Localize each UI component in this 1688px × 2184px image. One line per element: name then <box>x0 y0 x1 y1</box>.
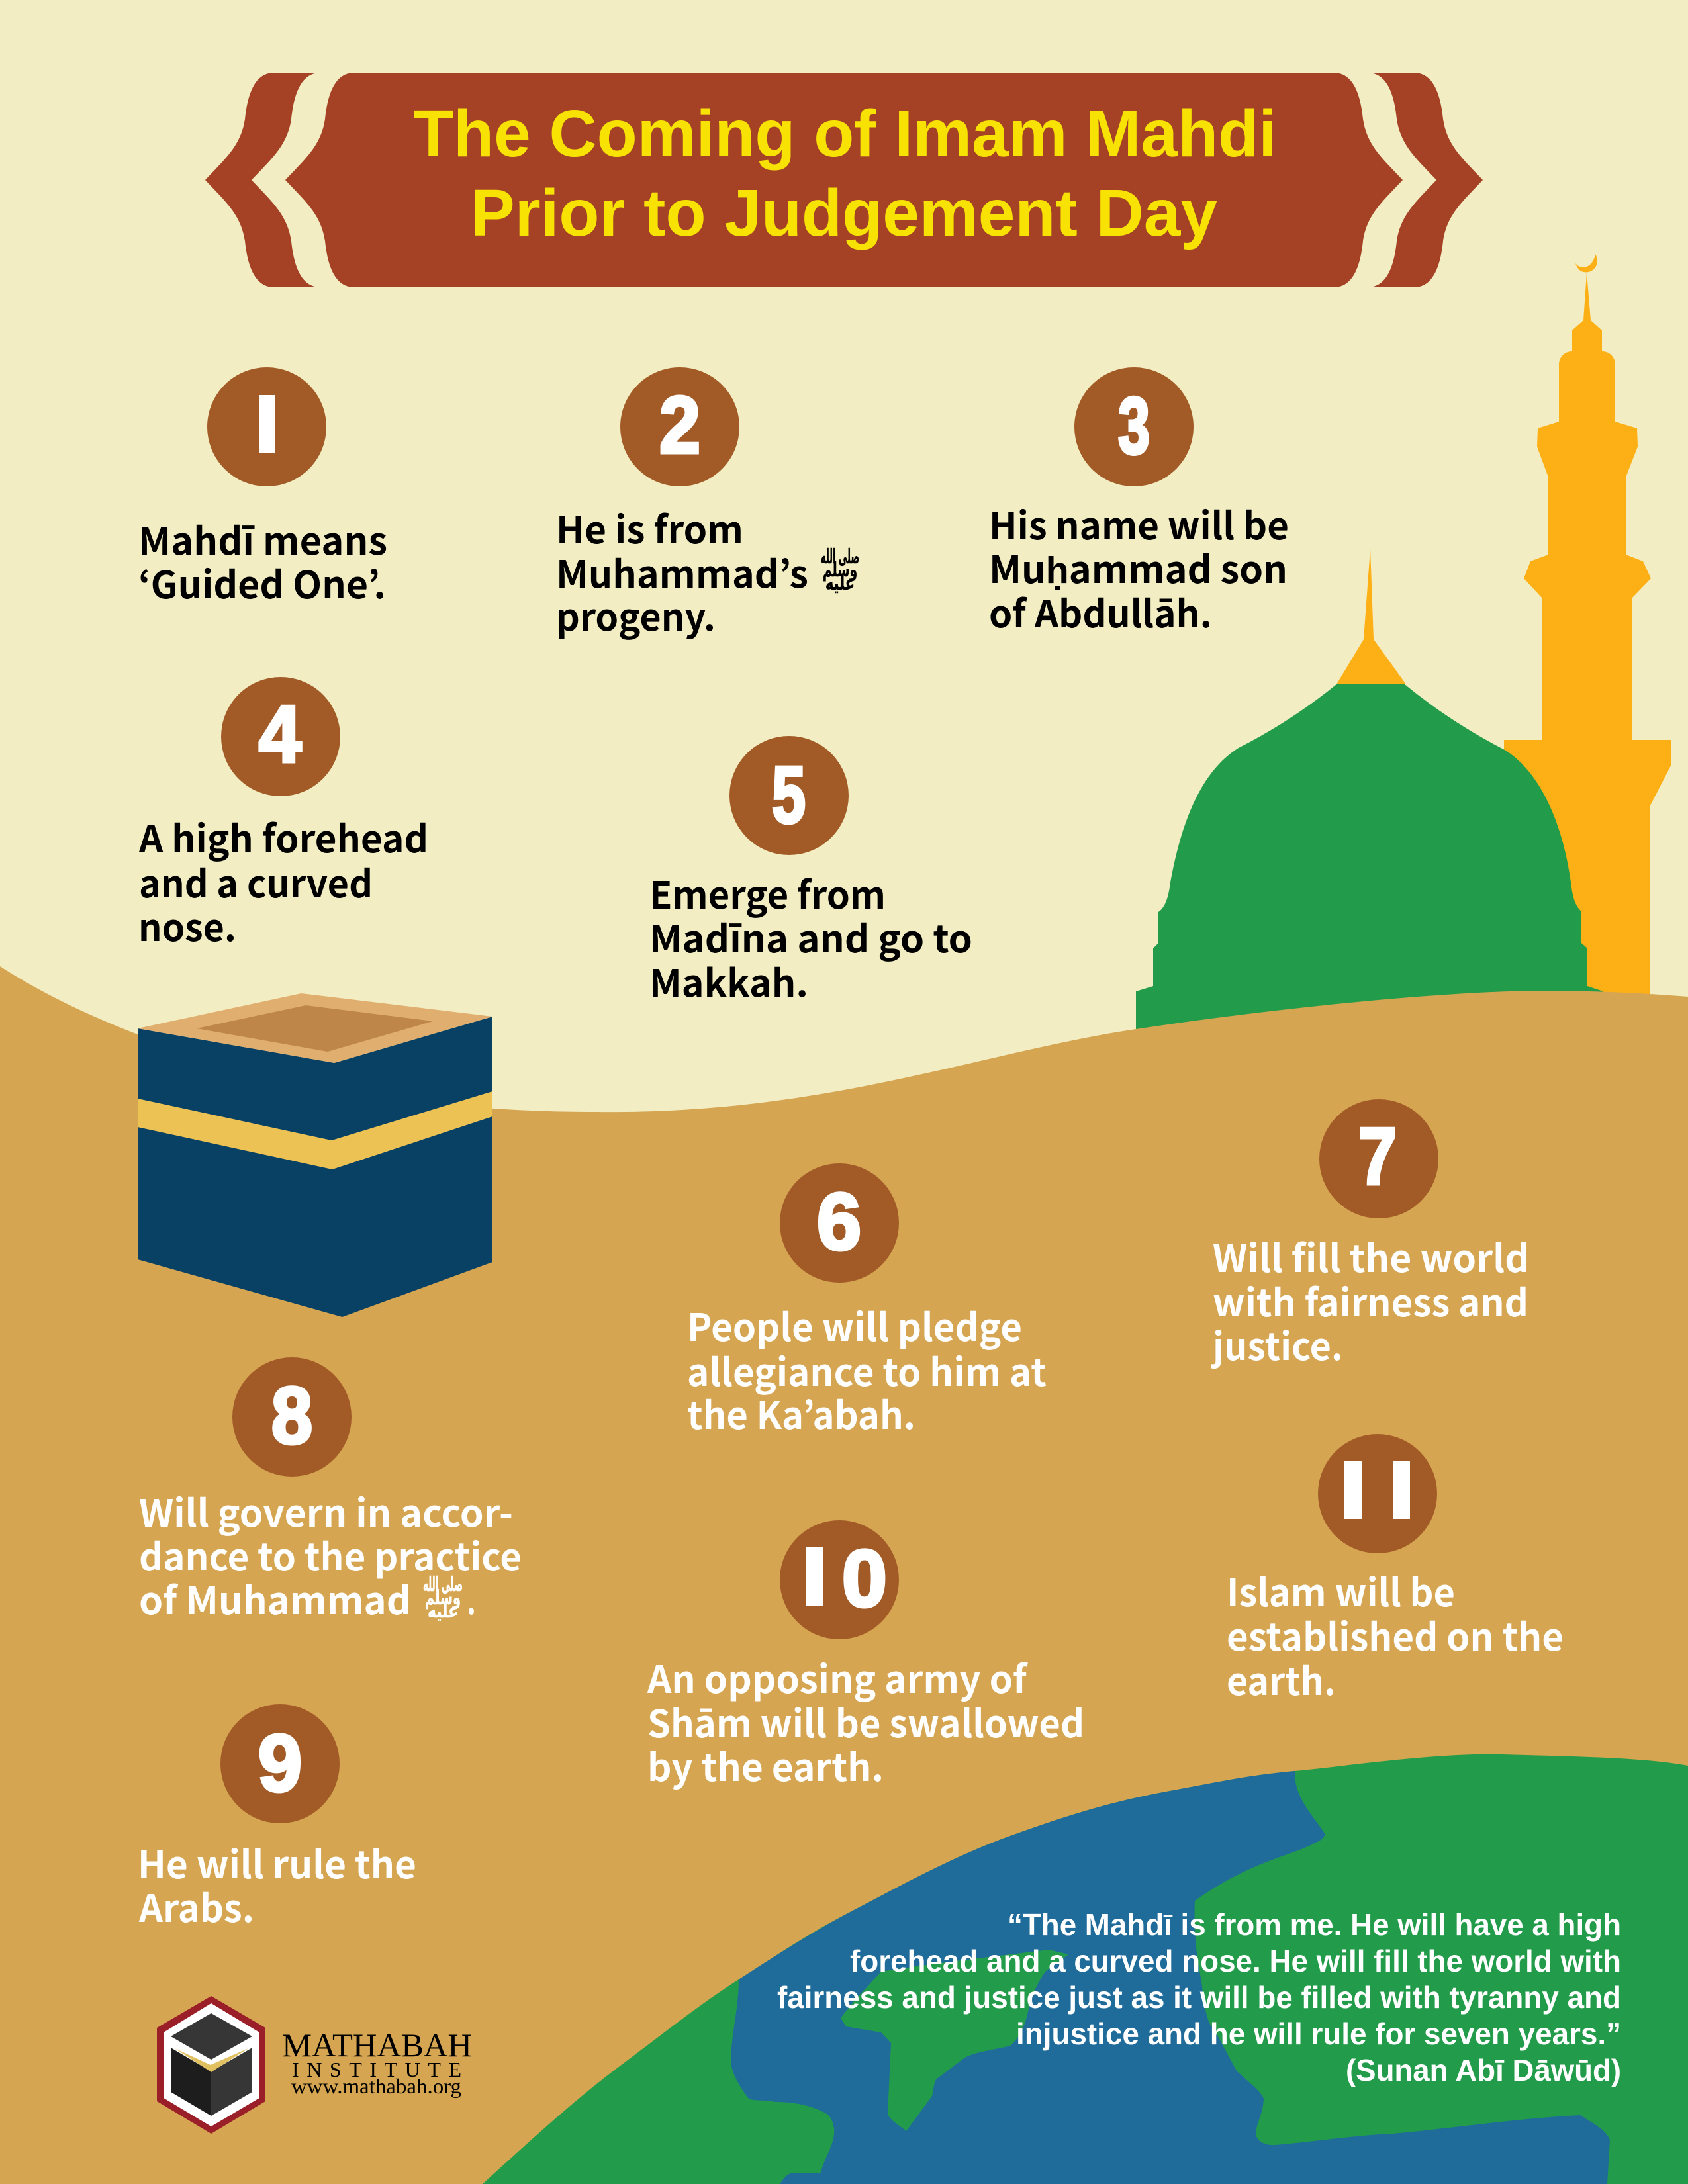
text: point 11: Islam will be <box>1227 1563 1455 1617</box>
number badge 10 <box>780 1520 899 1639</box>
title <box>413 97 1277 250</box>
text: point 8: dance to the practice <box>139 1527 522 1582</box>
number badge 6: 6 <box>817 1177 861 1267</box>
text: point 9: He will rule the <box>138 1835 416 1889</box>
number badge 6 <box>780 1163 899 1283</box>
text: point 1: ‘Guided One’. <box>138 555 386 610</box>
quote callout: forehead and a curved nose. He will fill the world with <box>850 1944 1621 1978</box>
number badge 10: 10 <box>790 1533 887 1623</box>
text: point 3 <box>989 496 1289 639</box>
logo wordmark <box>282 2026 472 2098</box>
icon: salutation calligraphy: عليه <box>428 1600 458 1623</box>
text: point 10: An opposing army of <box>647 1650 1029 1704</box>
number badge 1 <box>207 367 326 486</box>
icon: earth globe <box>483 1754 1688 2184</box>
quote callout: (Sunan Abī Dāwūd) <box>1346 2053 1621 2087</box>
text: point 2: Muhammad’s <box>556 545 808 599</box>
text: point 10: by the earth. <box>647 1738 884 1792</box>
title: The Coming of Imam Mahdi <box>413 97 1277 171</box>
text: point 6: the Ka’abah. <box>687 1386 915 1440</box>
text: point 4: A high forehead <box>138 809 428 864</box>
text: point 8: . <box>467 1571 476 1625</box>
icon: hexagon Kaaba emblem <box>157 1996 265 2134</box>
number badge 11 <box>1318 1434 1437 1553</box>
number badge 11: 11 <box>1328 1446 1422 1536</box>
number badge 4 <box>221 677 340 796</box>
text: point 6: People will pledge <box>687 1298 1022 1352</box>
panel: point 8: صلى الله <box>423 1573 463 1596</box>
text: point 1 <box>138 512 387 610</box>
icon: salutation calligraphy: وسلم <box>425 1586 461 1610</box>
text: point 8: of Muhammad <box>139 1571 411 1625</box>
icon: salutation calligraphy <box>821 545 859 595</box>
text: point 5: Makkah. <box>649 954 808 1008</box>
text: point 5: Emerge from <box>649 866 886 920</box>
number badge 9 <box>220 1704 340 1823</box>
text: point 7 <box>1210 1229 1529 1371</box>
number badge 5: 5 <box>772 750 806 840</box>
text: point 11 <box>1227 1563 1564 1706</box>
number badge 5 <box>729 736 849 855</box>
panel: point 3 <box>989 367 1289 639</box>
number badge 7: 7 <box>1358 1111 1397 1201</box>
banner: left bracket <box>205 73 320 287</box>
number badge 2 <box>620 367 739 486</box>
logo wordmark: INSTITUTE <box>292 2058 461 2081</box>
text: point 10 <box>647 1650 1084 1792</box>
quote callout: injustice and he will rule for seven years.” <box>1016 2017 1621 2051</box>
number badge 9: 9 <box>258 1718 302 1808</box>
text: point 6: allegiance to him at <box>687 1343 1047 1397</box>
text: point 4 <box>138 809 428 952</box>
number badge 8 <box>232 1357 352 1477</box>
number badge 8: 8 <box>271 1371 312 1461</box>
text: point 3: Muḥammad son <box>989 540 1288 594</box>
logo wordmark: MATHABAH <box>282 2026 472 2064</box>
text: point 8 <box>139 1484 522 1625</box>
quote callout: fairness and justice just as it will be filled with tyranny and <box>777 1980 1621 2015</box>
text: point 11: established on the <box>1227 1608 1564 1662</box>
text: point 5: Madīna and go to <box>649 909 972 964</box>
panel: point 8 <box>139 1357 522 1625</box>
text: point 9: Arabs. <box>138 1879 254 1933</box>
text: point 8: Will govern in accor- <box>139 1484 513 1538</box>
quote callout <box>777 1907 1621 2087</box>
number badge 1: 1 <box>242 380 287 470</box>
number badge 2: 2 <box>659 380 700 470</box>
text: point 2 <box>556 500 808 642</box>
panel: point 7 <box>1210 1099 1529 1371</box>
text: point 4: nose. <box>138 898 236 952</box>
icon: salutation calligraphy: عليه <box>825 572 855 595</box>
panel: point 4 <box>138 677 428 952</box>
logo: Mathabah Institute <box>157 1996 472 2134</box>
text: point 11: earth. <box>1227 1652 1336 1706</box>
sand ground <box>0 966 1688 2184</box>
panel: point 5 <box>649 736 972 1008</box>
text: point 5 <box>649 866 972 1008</box>
title: Prior to Judgement Day <box>471 176 1217 250</box>
icon: minaret <box>1504 254 1671 1006</box>
text: صلى الله <box>821 545 859 569</box>
panel: point 9 <box>138 1704 416 1933</box>
banner: centre panel <box>285 73 1403 287</box>
icon: Kaaba <box>138 993 492 1317</box>
icon: green dome <box>1136 549 1603 1059</box>
text: point 1: Mahdī means <box>138 512 387 566</box>
quote callout: “The Mahdī is from me. He will have a high <box>1008 1907 1621 1942</box>
text: point 7: Will fill the world <box>1213 1229 1529 1283</box>
text: point 7: justice. <box>1210 1317 1343 1371</box>
title banner <box>205 73 1483 287</box>
number badge 3: 3 <box>1118 381 1150 471</box>
panel: point 2 <box>556 367 859 642</box>
text: point 6 <box>687 1298 1047 1440</box>
panel: point 11 <box>1227 1434 1564 1706</box>
text: point 4: and a curved <box>139 854 373 909</box>
text: point 2: He is from <box>556 500 743 555</box>
banner: right bracket <box>1368 73 1483 287</box>
panel: point 1 <box>138 367 387 610</box>
text: point 3: His name will be <box>989 496 1289 551</box>
text: point 2: progeny. <box>556 588 716 642</box>
number badge 3 <box>1074 367 1194 486</box>
text: point 3: of Abdullāh. <box>989 584 1212 639</box>
icon: salutation calligraphy: وسلم <box>823 559 857 582</box>
panel: point 10 <box>647 1520 1084 1792</box>
panel: point 6 <box>687 1163 1047 1440</box>
text: point 7: with fairness and <box>1213 1273 1528 1328</box>
number badge 7 <box>1319 1099 1438 1218</box>
text: point 9 <box>138 1835 416 1933</box>
icon: salutation calligraphy <box>423 1573 463 1623</box>
text: point 10: Shām will be swallowed <box>647 1694 1084 1749</box>
logo wordmark: www.mathabah.org <box>291 2074 461 2098</box>
number badge 4: 4 <box>259 689 301 779</box>
